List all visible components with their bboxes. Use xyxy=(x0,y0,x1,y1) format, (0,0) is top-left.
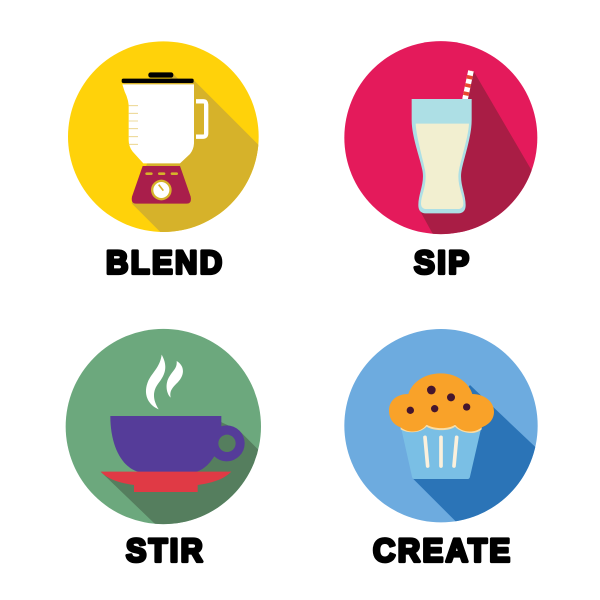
infographic xyxy=(66,41,538,564)
heading: sip: SIP xyxy=(414,244,472,280)
blender base xyxy=(132,166,191,204)
base buttons xyxy=(145,172,178,175)
muffin top xyxy=(389,373,494,432)
panel: sip xyxy=(344,41,548,281)
create icon xyxy=(344,329,538,522)
lid shadow strip xyxy=(123,83,194,85)
yellow circle xyxy=(68,41,259,232)
panel: create xyxy=(344,329,555,568)
blend icon xyxy=(68,41,259,232)
muffin wrapper xyxy=(401,426,482,479)
muffin long shadow xyxy=(414,385,536,522)
blue circle xyxy=(344,329,538,522)
straw xyxy=(465,71,471,99)
measuring marks xyxy=(129,106,138,144)
milkshake xyxy=(416,124,469,209)
cup xyxy=(110,416,221,473)
glass xyxy=(412,99,472,213)
glass long shadow xyxy=(421,70,532,234)
cup long shadow xyxy=(101,422,258,524)
heading: blend: BLEND xyxy=(106,244,224,280)
heading: create: CREATE xyxy=(373,532,512,568)
pink circle xyxy=(344,41,537,234)
saucer xyxy=(101,472,231,492)
steam xyxy=(146,355,183,409)
heading: stir: STIR xyxy=(126,532,205,568)
dial xyxy=(151,180,172,200)
blender handle xyxy=(196,101,206,137)
green circle xyxy=(66,329,261,524)
wrapper stripes xyxy=(425,437,457,466)
panel: stir xyxy=(66,329,277,568)
blender lid xyxy=(122,72,194,83)
muffin edge xyxy=(401,425,482,433)
stir icon xyxy=(66,328,261,524)
panel: blend xyxy=(68,41,259,276)
blender jar xyxy=(122,84,194,163)
handle hole xyxy=(218,435,236,452)
blender long shadow xyxy=(132,74,258,232)
sip icon xyxy=(344,41,538,234)
cup handle xyxy=(209,425,245,461)
chocolate chips xyxy=(407,386,470,414)
